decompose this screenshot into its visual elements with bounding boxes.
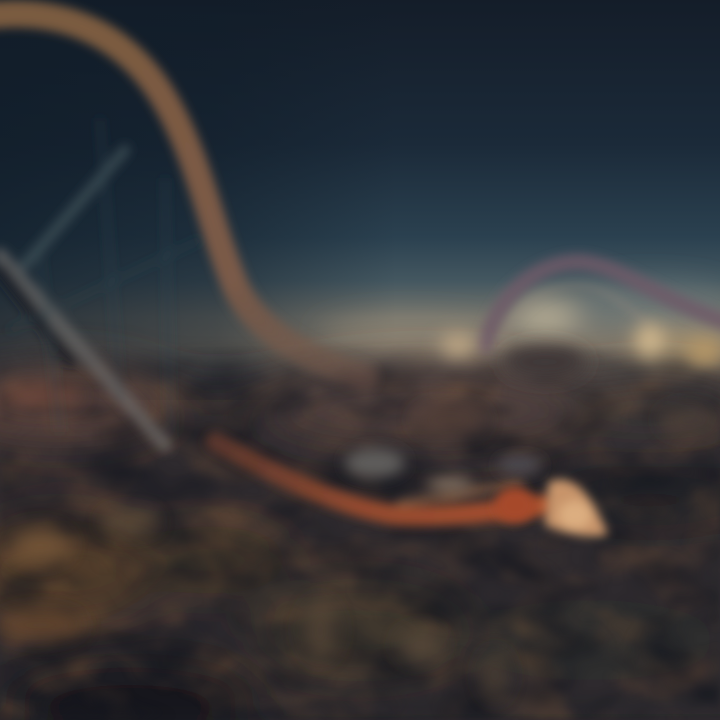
ground texture — [0, 340, 720, 720]
coaster train nose — [495, 479, 608, 537]
ground mass — [0, 366, 720, 720]
supports: lattice on the left — [0, 120, 200, 445]
lower orange track — [215, 442, 545, 516]
small distant arch — [485, 262, 720, 345]
main track arc — [0, 14, 365, 378]
pale highlights on the train — [345, 449, 542, 490]
horizon glow — [320, 281, 720, 364]
lights on the horizon — [440, 324, 720, 380]
ground highlights — [0, 383, 720, 699]
